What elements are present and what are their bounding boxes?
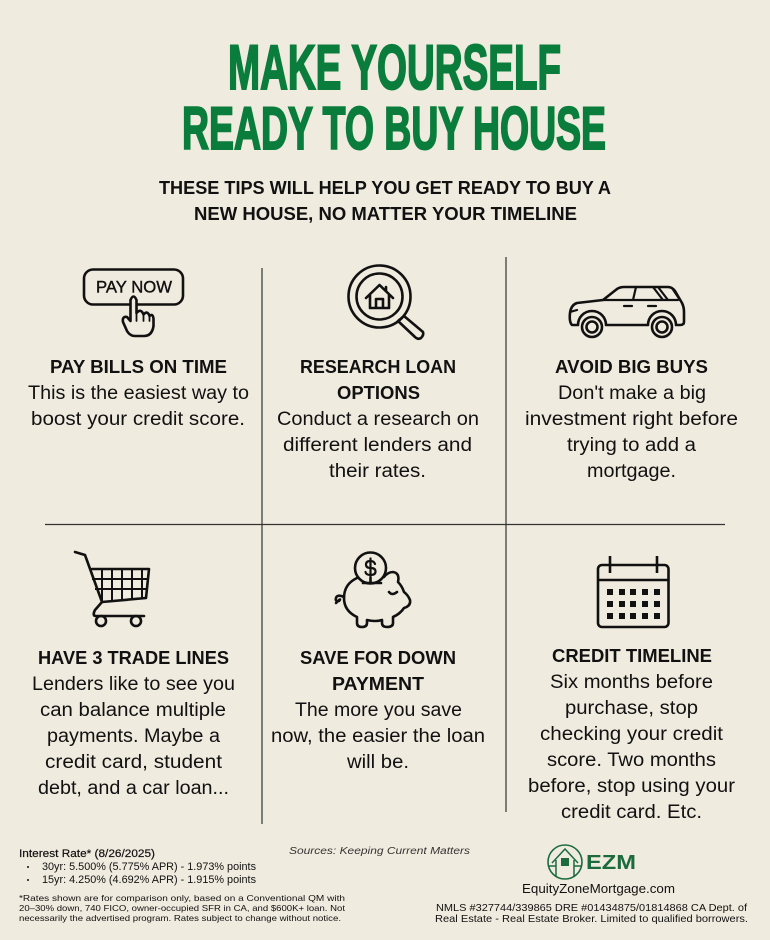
interest rate block: 30yr: 5.500% (5.775% APR) - 1.973% points xyxy=(42,861,256,873)
body: research loan options: different lenders and xyxy=(283,435,472,456)
body: save for down payment: will be. xyxy=(346,752,409,773)
icon: calendar xyxy=(598,556,668,627)
heading: have 3 trade lines: HAVE 3 TRADE LINES xyxy=(38,647,229,668)
subtitle xyxy=(159,177,611,224)
heading: save for down payment: SAVE FOR DOWN xyxy=(300,647,456,668)
website: EquityZoneMortgage.com xyxy=(522,881,675,896)
icon: pay now button with hand: PAY NOW xyxy=(96,278,172,296)
panel: credit timeline xyxy=(528,556,736,823)
logo: EZM: EZM xyxy=(586,852,636,874)
heading: avoid big buys: AVOID BIG BUYS xyxy=(555,356,708,377)
body: pay bills on time xyxy=(28,383,249,430)
heading: save for down payment: PAYMENT xyxy=(332,673,425,694)
panel: have 3 trade lines xyxy=(32,552,235,799)
body: research loan options: Conduct a research on xyxy=(277,409,479,430)
body: credit timeline xyxy=(528,672,736,823)
icon: pay now button with hand xyxy=(84,270,183,336)
body: credit timeline: checking your credit xyxy=(540,724,724,745)
body: have 3 trade lines: credit card, student xyxy=(45,752,223,773)
icon: shopping cart xyxy=(75,552,149,626)
licensing text: Real Estate - Real Estate Broker. Limited to qualified borrowers. xyxy=(435,913,748,925)
icon: piggy bank with coin xyxy=(336,552,410,627)
body: avoid big buys xyxy=(525,383,738,482)
body: credit timeline: credit card. Etc. xyxy=(561,802,702,823)
body: save for down payment: now, the easier the loan xyxy=(271,726,485,747)
body: have 3 trade lines xyxy=(32,674,235,799)
icon: magnifying glass with house xyxy=(348,266,423,339)
body: pay bills on time: boost your credit score. xyxy=(31,409,245,430)
body: research loan options: their rates. xyxy=(329,461,426,482)
icon: suv car xyxy=(570,287,684,337)
body: credit timeline: purchase, stop xyxy=(565,698,698,719)
rates disclaimer xyxy=(19,893,346,923)
logo: EZM xyxy=(548,845,636,879)
title xyxy=(182,33,606,162)
body: avoid big buys: mortgage. xyxy=(587,461,676,482)
body: avoid big buys: trying to add a xyxy=(567,435,696,456)
interest rate block: 15yr: 4.250% (4.692% APR) - 1.915% points xyxy=(42,874,256,886)
body: credit timeline: before, stop using your xyxy=(528,776,736,797)
title: MAKE YOURSELF xyxy=(228,33,561,103)
heading: research loan options xyxy=(300,356,456,403)
panel: pay bills on time xyxy=(28,270,249,430)
panel: avoid big buys xyxy=(525,287,738,482)
body: avoid big buys: investment right before xyxy=(525,409,738,430)
body: research loan options xyxy=(277,409,479,482)
body: save for down payment xyxy=(271,700,485,773)
licensing text xyxy=(435,902,748,925)
body: have 3 trade lines: payments. Maybe a xyxy=(47,726,220,747)
interest rate block xyxy=(19,848,256,886)
rates disclaimer: necessarily the advertised program. Rates subject to change without notice. xyxy=(19,913,341,923)
body: credit timeline: score. Two months xyxy=(547,750,716,771)
body: credit timeline: Six months before xyxy=(550,672,713,693)
body: have 3 trade lines: debt, and a car loan... xyxy=(38,778,229,799)
panel: save for down payment xyxy=(271,552,485,773)
body: pay bills on time: This is the easiest way to xyxy=(28,383,249,404)
body: avoid big buys: Don't make a big xyxy=(558,383,706,404)
heading: save for down payment xyxy=(300,647,456,694)
sources: Sources: Keeping Current Matters xyxy=(289,846,470,857)
heading: pay bills on time: PAY BILLS ON TIME xyxy=(50,356,227,377)
interest rate block: Interest Rate* (8/26/2025) xyxy=(19,848,155,860)
heading: research loan options: OPTIONS xyxy=(337,382,420,403)
body: save for down payment: The more you save xyxy=(295,700,462,721)
rates disclaimer: *Rates shown are for comparison only, based on a Conventional QM with xyxy=(19,893,345,903)
subtitle: THESE TIPS WILL HELP YOU GET READY TO BUY A xyxy=(159,177,611,198)
body: have 3 trade lines: can balance multiple xyxy=(40,700,226,721)
licensing text: NMLS #327744/339865 DRE #01434875/01814868 CA Dept. of xyxy=(436,902,747,914)
heading: research loan options: RESEARCH LOAN xyxy=(300,356,456,377)
heading: credit timeline: CREDIT TIMELINE xyxy=(552,645,712,666)
panel: research loan options xyxy=(277,266,479,482)
rates disclaimer: 20–30% down, 740 FICO, owner-occupied SFR in CA, and $600K+ loan. Not xyxy=(19,903,346,913)
subtitle: NEW HOUSE, NO MATTER YOUR TIMELINE xyxy=(194,203,577,224)
body: have 3 trade lines: Lenders like to see you xyxy=(32,674,235,695)
